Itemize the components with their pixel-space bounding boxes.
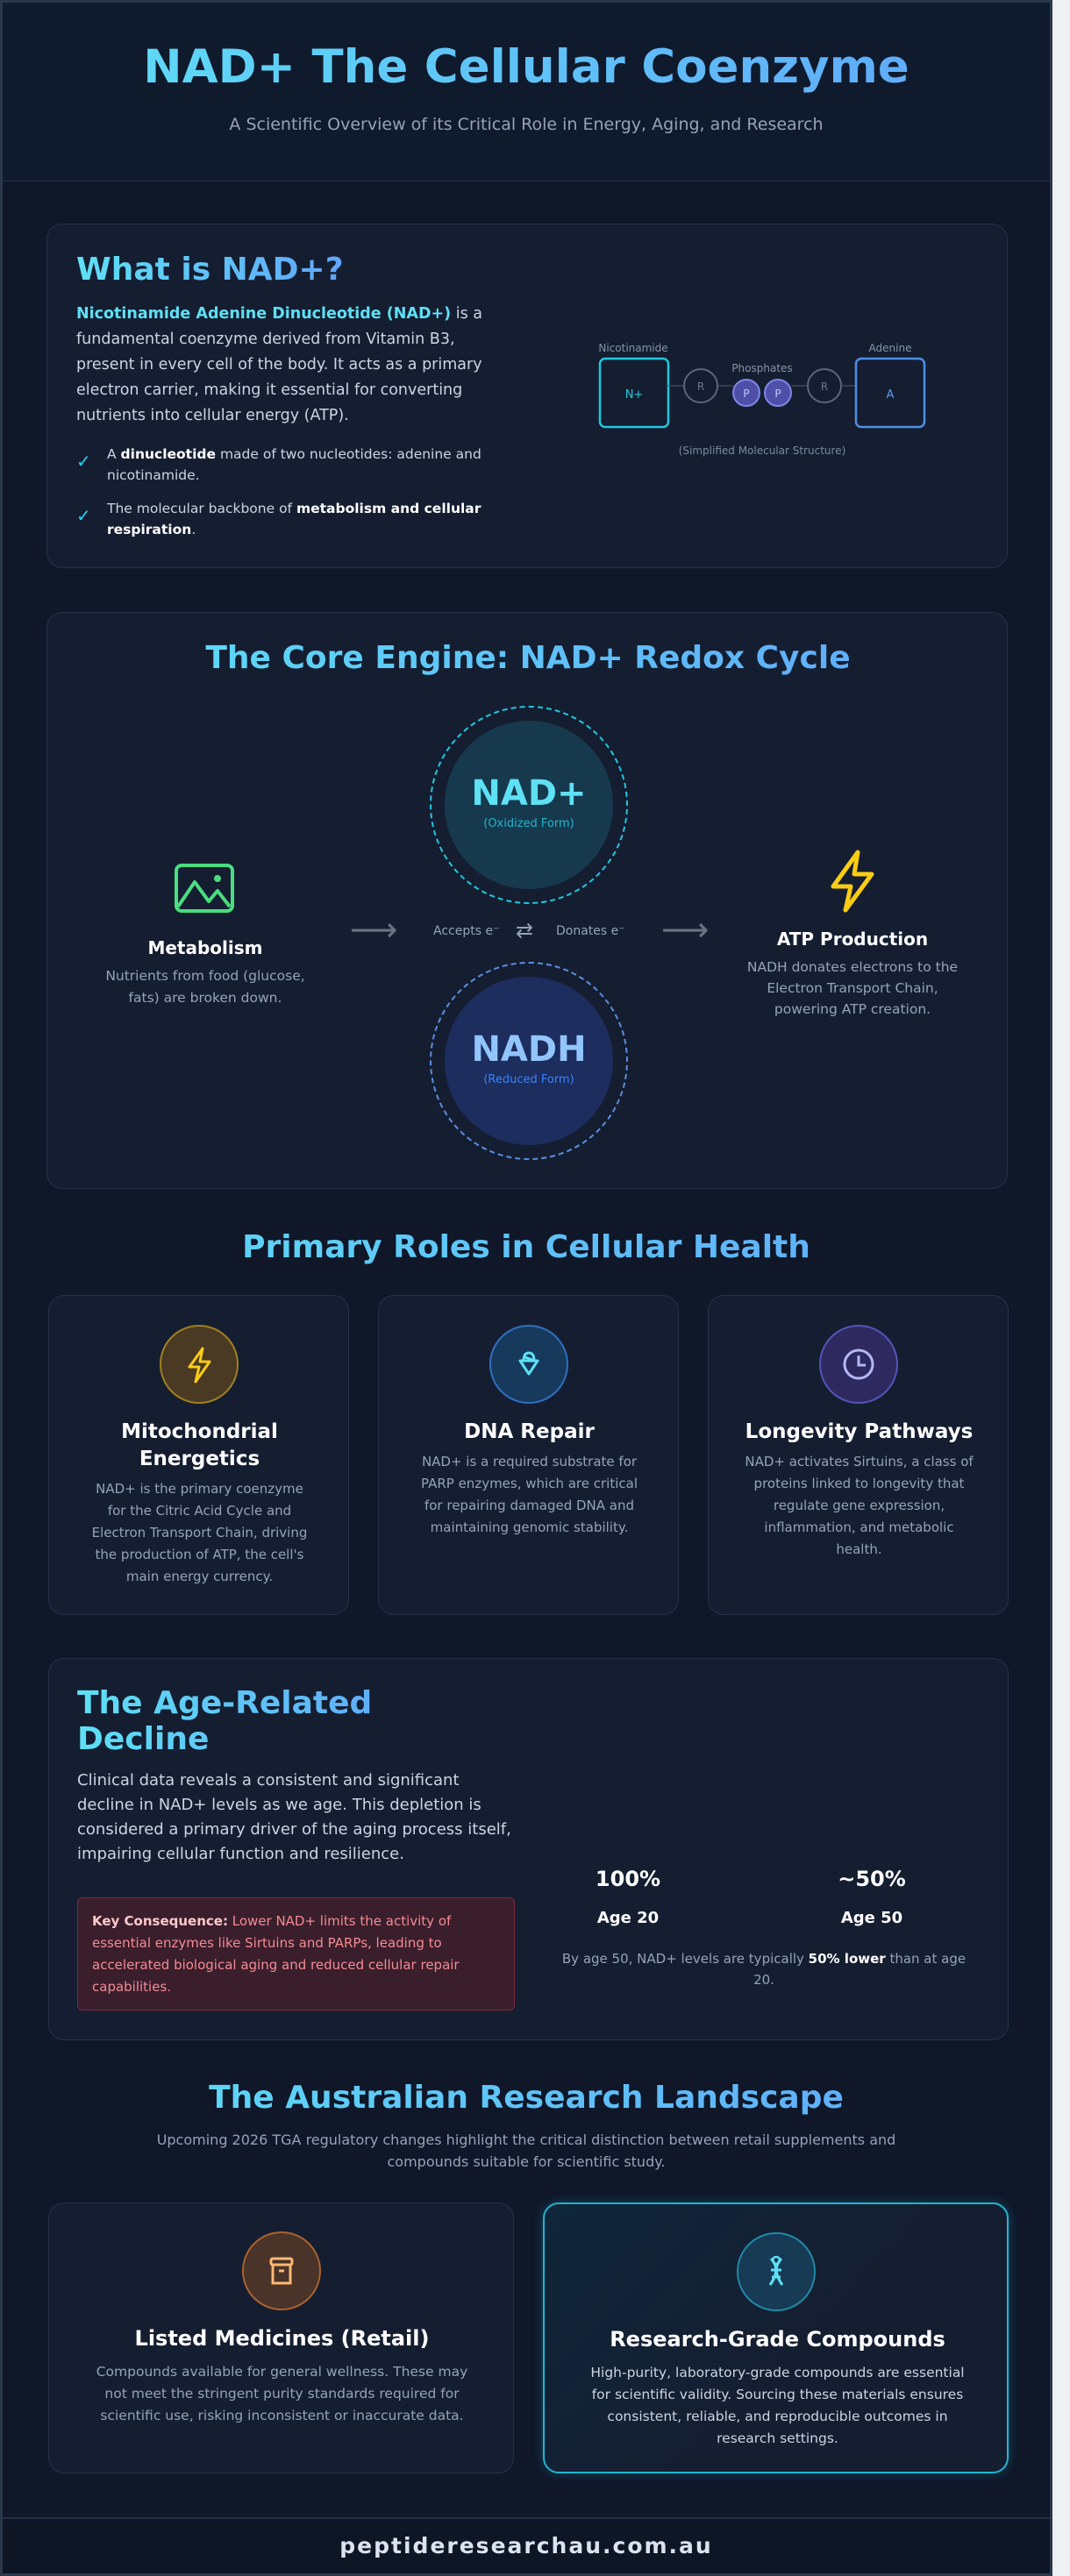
text: NAD+ is a required substrate for PARP enzymes, which are critical for repairing damaged DNA and maintaining genomic stability. bbox=[421, 1454, 638, 1535]
molecule diagram: Phosphates bbox=[731, 362, 793, 374]
text: ATP production: NADH donates electrons to the Electron Transport Chain, powering ATP creation. bbox=[747, 959, 958, 1017]
panel: longevity bbox=[708, 1295, 1009, 1615]
label: accepts: Accepts e⁻ bbox=[433, 924, 499, 938]
panel: what is NAD+ bbox=[46, 224, 1008, 568]
heading: primary roles: Primary Roles in Cellular Health bbox=[242, 1229, 810, 1265]
molecule diagram: A bbox=[887, 388, 895, 402]
panel: listed medicines bbox=[48, 2202, 514, 2473]
check list: ✓ bbox=[76, 451, 91, 472]
molecule diagram bbox=[598, 342, 926, 457]
heading: australian landscape: The Australian Research Landscape bbox=[209, 2080, 844, 2116]
icon: metabolism image bbox=[175, 864, 234, 913]
callout: key consequence: Key Consequence: Lower NAD+ limits the activity of essential enzymes like Sirtuins and PARPs, leading to accelerated biological aging and reduced cellular repair capabilities. bbox=[92, 1913, 460, 1995]
text: NAD+ is the primary coenzyme for the Citric Acid Cycle and Electron Transport Chain, driving the production of ATP, the cell's main energy currency. bbox=[92, 1481, 307, 1584]
heading: redox cycle bbox=[47, 639, 1009, 677]
text bbox=[96, 2326, 467, 2423]
text: Listed Medicines (Retail) bbox=[135, 2326, 429, 2351]
text bbox=[590, 2327, 965, 2446]
molecule diagram: Nicotinamide bbox=[598, 342, 668, 354]
circle: NAD+ bbox=[430, 706, 628, 904]
molecule diagram: R bbox=[821, 381, 828, 393]
molecule diagram: R bbox=[697, 381, 704, 393]
text: metabolism: Nutrients from food (glucose, fats) are broken down. bbox=[105, 968, 305, 1006]
circle: NADH bbox=[430, 962, 628, 1160]
title: NAD+ The Cellular Coenzyme bbox=[143, 40, 910, 94]
text: ATP production: ATP Production bbox=[777, 929, 928, 950]
icon: bolt bbox=[831, 850, 874, 912]
molecule diagram: (Simplified Molecular Structure) bbox=[679, 445, 845, 457]
arrow: right: ⟶ bbox=[661, 910, 709, 949]
icon: bolt bbox=[160, 1325, 239, 1404]
check list: The molecular backbone of metabolism and cellular respiration. bbox=[107, 501, 481, 537]
heading: age decline: The Age-Related Decline bbox=[77, 1685, 372, 1757]
circle: NADH: NADH bbox=[471, 1029, 587, 1070]
stat: 100%: 100% bbox=[596, 1867, 660, 1891]
circle: NADH: (Reduced Form) bbox=[483, 1073, 574, 1086]
subtitle: A Scientific Overview of its Critical Role in Energy, Aging, and Research bbox=[229, 115, 824, 134]
molecule diagram: Adenine bbox=[869, 342, 911, 354]
text: metabolism: Metabolism bbox=[147, 937, 263, 958]
text: Research-Grade Compounds bbox=[610, 2327, 945, 2352]
heading: australian landscape bbox=[3, 2079, 1050, 2117]
text block: Clinical data reveals a consistent and significant decline in NAD+ levels as we age. This depletion is considered a primary driver of the aging process itself, impairing cellular function and resilience. bbox=[77, 1771, 511, 1863]
text: DNA Repair bbox=[464, 1420, 595, 1443]
footer text: peptideresearchau.com.au bbox=[339, 2533, 713, 2558]
molecule diagram: P bbox=[743, 388, 750, 400]
label: donates: Donates e⁻ bbox=[556, 924, 625, 938]
text: Mitochondrial Energetics bbox=[121, 1420, 278, 1470]
header bbox=[3, 3, 1050, 181]
circle: NAD+: (Oxidized Form) bbox=[483, 817, 574, 830]
text: Compounds available for general wellness. These may not meet the stringent purity standards required for scientific use, risking inconsistent or inaccurate data. bbox=[96, 2364, 467, 2423]
heading: redox cycle: The Core Engine: NAD+ Redox Cycle bbox=[205, 640, 851, 676]
circle: NAD+: NAD+ bbox=[471, 773, 587, 814]
panel: redox cycle bbox=[46, 612, 1008, 1189]
icon: jar bbox=[242, 2231, 321, 2310]
stat: 50% bbox=[838, 1867, 906, 1927]
text: NAD+ activates Sirtuins, a class of proteins linked to longevity that regulate gene expression, inflammation, and metabolic health. bbox=[745, 1454, 974, 1557]
text block: definition: Nicotinamide Adenine Dinucleotide (NAD+) is a fundamental coenzyme derived from Vitamin B3, present in every cell of the body. It acts as a primary electron carrier, making it essential for converting nutrients into cellular energy (ATP). bbox=[76, 305, 482, 424]
footer bbox=[3, 2517, 1050, 2573]
panel: mitochondrial bbox=[48, 1295, 349, 1615]
panel: age decline bbox=[48, 1658, 1009, 2040]
stat: 100% bbox=[596, 1867, 660, 1927]
icon: dna bbox=[737, 2232, 816, 2311]
text: High-purity, laboratory-grade compounds are essential for scientific validity. Sourcing these materials ensures consistent, reliable, and reproducible outcomes in research settings. bbox=[590, 2365, 965, 2446]
text: ATP production bbox=[747, 929, 958, 1017]
check list: ✓ bbox=[76, 505, 91, 526]
note: By age 50, NAD+ levels are typically 50% lower than at age 20. bbox=[562, 1951, 966, 1988]
stat: 100%: Age 20 bbox=[597, 1909, 659, 1927]
arrow: left: ⟶ bbox=[350, 910, 397, 949]
check list bbox=[76, 446, 482, 537]
text bbox=[92, 1420, 307, 1584]
panel: research grade bbox=[543, 2202, 1009, 2473]
check list: A dinucleotide made of two nucleotides: adenine and nicotinamide. bbox=[107, 446, 482, 483]
icon: swap: ⇄ bbox=[516, 918, 533, 943]
heading: what is NAD+: What is NAD+? bbox=[76, 252, 344, 288]
text: Longevity Pathways bbox=[745, 1420, 973, 1443]
text: metabolism bbox=[105, 937, 305, 1006]
icon: clock bbox=[819, 1325, 898, 1404]
subtitle: Upcoming 2026 TGA regulatory changes highlight the critical distinction between retail supplements and compounds suitable for scientific study. bbox=[157, 2131, 895, 2170]
heading: primary roles bbox=[3, 1228, 1050, 1266]
stat: 50%: ~50% bbox=[838, 1867, 906, 1891]
molecule diagram: P bbox=[774, 388, 781, 400]
stat: 50%: Age 50 bbox=[841, 1909, 902, 1927]
molecule diagram: N+ bbox=[625, 388, 643, 402]
icon: shield bbox=[489, 1325, 568, 1404]
panel: DNA repair bbox=[378, 1295, 679, 1615]
callout: key consequence bbox=[77, 1897, 515, 2010]
